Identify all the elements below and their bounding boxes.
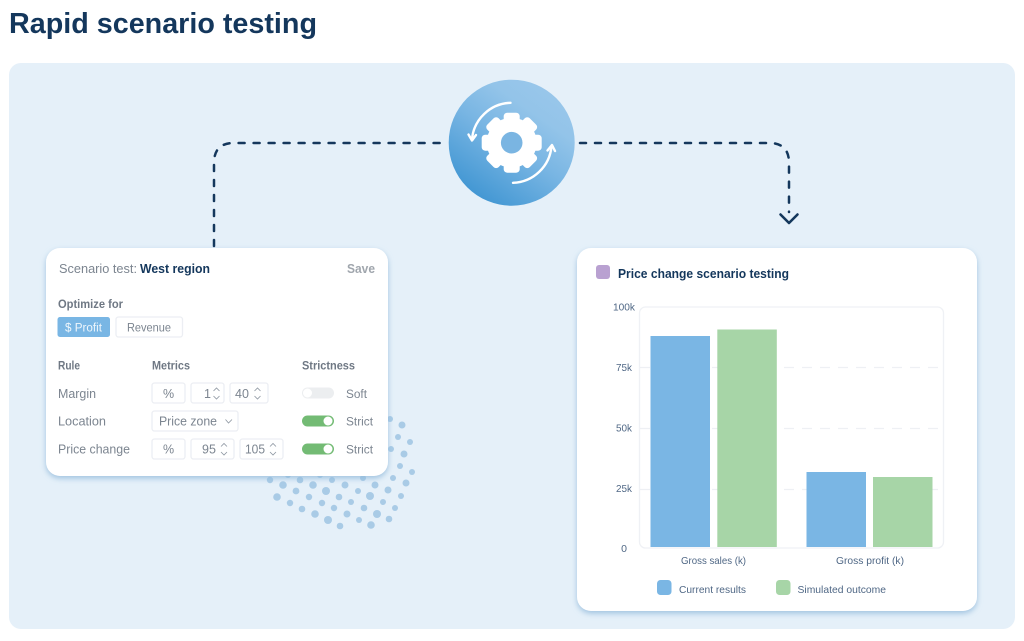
optimize for label: Optimize for [58,299,124,311]
panel: scenario test card [46,248,388,476]
table headers: Rule [58,360,80,372]
table headers: Metrics [152,360,190,372]
row: margin [58,383,368,403]
dot pattern [267,416,415,529]
row: location: Location [58,414,106,428]
save label: Save [347,262,375,276]
bar chart [613,302,944,567]
row: price change: % [163,442,174,456]
button: revenue: Revenue [127,322,171,334]
row: location [58,411,374,431]
x axis labels: Gross profit (k) [836,555,904,567]
x axis labels: Gross sales (k) [681,555,746,567]
row: location: Price zone [159,414,217,428]
row: price change [58,439,374,459]
button: revenue [116,317,182,337]
y axis labels: 25k [616,483,633,495]
row: margin: % [163,387,174,401]
button: profit [58,317,110,337]
legend: Simulated outcome [798,584,886,596]
card heading: West region [140,261,210,276]
card heading: Scenario test: [59,261,137,276]
row: margin: 1 [204,387,211,401]
table headers: Strictness [302,360,355,372]
arrow: dashed connector from gear to results card [580,143,798,223]
row: margin: Soft [346,389,368,401]
bars: gross profit [806,472,932,547]
legend: Current results [679,584,746,596]
bars: gross sales [650,330,777,547]
y axis labels: 0 [621,543,627,555]
row: price change: 105 [245,442,265,456]
panel: results card [577,248,977,611]
icon: gear with rotating arrows [449,80,575,206]
x axis labels [681,555,904,567]
legend [657,580,886,596]
y axis labels: 100k [613,302,636,314]
y axis labels: 75k [616,362,633,374]
title: Rapid scenario testing [9,8,317,40]
row: location: Strict [346,416,374,428]
row: price change: Price change [58,442,130,456]
button: profit: $ Profit [65,322,103,334]
row: price change: Strict [346,444,374,456]
row: margin: 40 [235,387,249,401]
y axis labels [613,302,636,555]
table headers [58,360,355,372]
row: price change: 95 [202,442,216,456]
y axis labels: 50k [616,422,633,434]
card heading: Price change scenario testing [618,267,789,281]
card heading [59,261,210,276]
arrow: dashed connector from scenario card to gear [214,143,444,246]
row: margin: Margin [58,387,96,401]
